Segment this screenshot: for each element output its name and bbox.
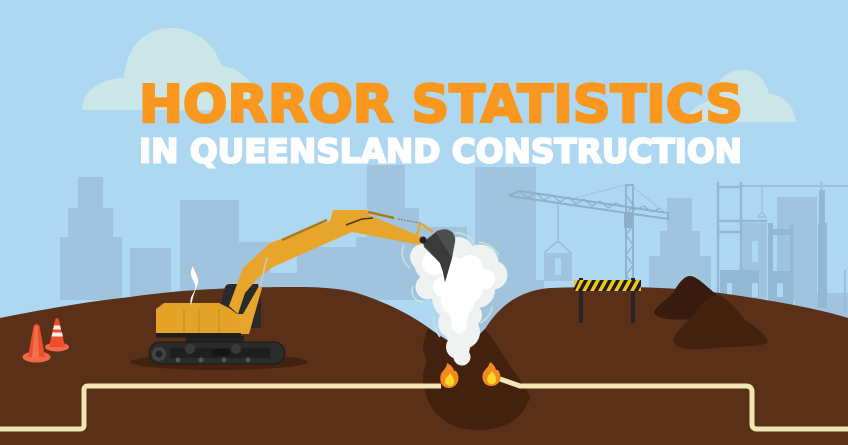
dirt mound: back: [654, 276, 717, 320]
gas pipeline: right: [500, 379, 848, 429]
steam from engine: [190, 266, 198, 305]
traffic cone: small: [45, 318, 69, 352]
tower crane: jib and mast: [510, 184, 668, 300]
dirt mound: front: [673, 295, 768, 350]
cloud: right: [687, 70, 796, 122]
ground hills: [0, 287, 848, 445]
title: [139, 75, 743, 170]
flame: left: [440, 363, 458, 388]
excavator boom and arm: [229, 210, 423, 314]
excavator tracks: [149, 336, 285, 364]
barrier: [574, 278, 641, 323]
excavator bucket: [420, 229, 455, 282]
heading line 2: IN QUEENSLAND CONSTRUCTION: [139, 132, 742, 170]
flame: right: [482, 362, 501, 386]
construction frames: [717, 182, 848, 312]
traffic cone: large: [22, 324, 50, 362]
motion lines: [402, 233, 499, 337]
excavator cab: [220, 284, 261, 328]
crane load: [544, 253, 572, 281]
smoke plume: [410, 237, 508, 366]
excavator: [130, 210, 433, 370]
excavator body: [156, 303, 241, 333]
dark excavated pit: [423, 328, 530, 430]
gas pipeline: left: [0, 386, 441, 429]
cloud: left: [82, 28, 262, 110]
city skyline: [60, 165, 848, 337]
excavator shadow: [130, 354, 308, 370]
heading line 1: HORROR STATISTICS: [139, 75, 743, 135]
